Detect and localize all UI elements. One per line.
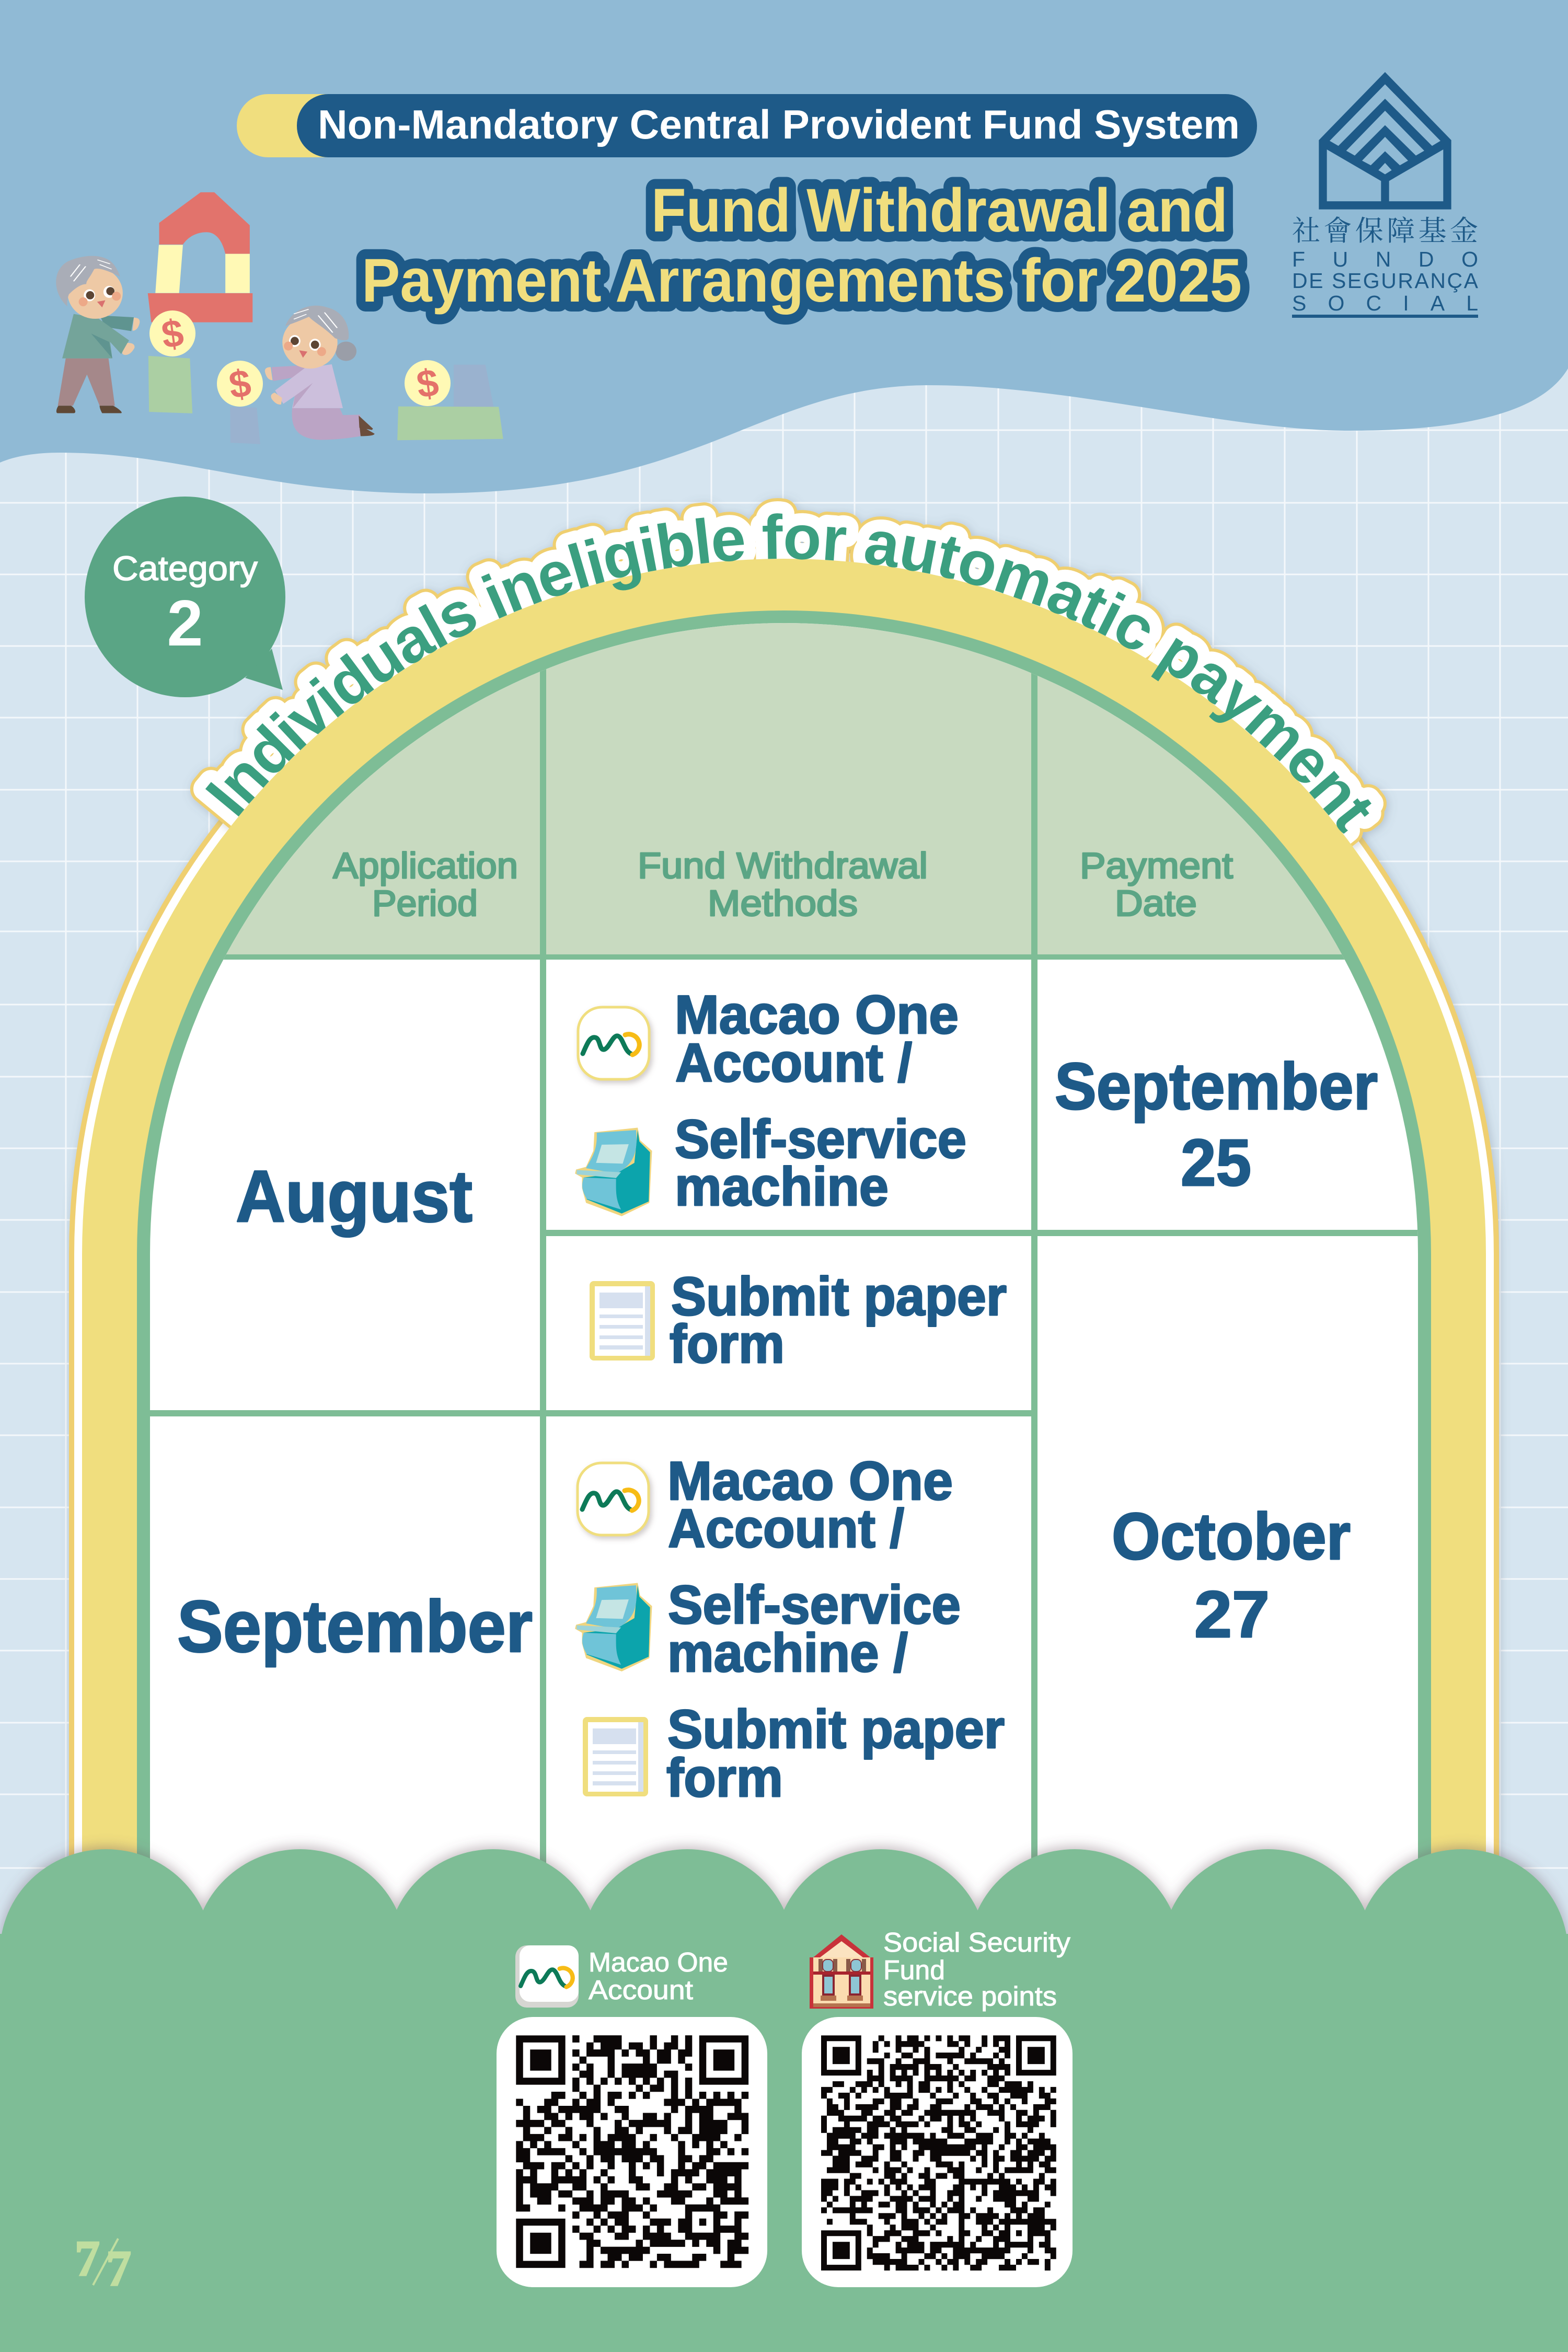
footer label: Social Security Fund service points: service points (883, 1981, 1057, 2012)
logo: Fundo de Segurança Social: FUNDO (1292, 247, 1478, 271)
method text: submit paper form (September): Submit paper (667, 1699, 1005, 1760)
method text: Macao One Account (September): Macao One (667, 1451, 953, 1512)
icon: Macao One Account (September) (578, 1463, 649, 1535)
footer icon: Macao One Account app (515, 1945, 579, 2008)
logo: Fundo de Segurança Social: SOCIAL (1292, 291, 1478, 315)
method text: Macao One Account (675, 985, 959, 1093)
column header: payment date: Date (1115, 883, 1197, 924)
curved heading outline: Individuals ineligible for automatic payment (189, 497, 1389, 850)
column header: application period: Application (333, 845, 518, 886)
curved heading outline: Individuals ineligible for automatic payment (193, 501, 1383, 844)
method text: Macao One Account (September): Account / (668, 1498, 904, 1559)
page number 7/7 (75, 2230, 131, 2296)
payment date: September 25: September (1055, 1050, 1378, 1123)
column header: payment date (1080, 845, 1233, 924)
payment date: September 25 (1055, 1050, 1378, 1200)
page number 7/7: 7 (106, 2240, 131, 2296)
column header: withdrawal methods: Methods (708, 883, 858, 924)
method text: submit paper form (670, 1266, 1007, 1375)
illustration: elderly couple with building blocks and coins: $ (414, 361, 441, 406)
method text: self-service machine: Self-service (675, 1109, 966, 1170)
QR card: Macao One Account (497, 2017, 767, 2287)
main title (362, 176, 1242, 315)
column header: withdrawal methods: Fund Withdrawal (638, 845, 928, 886)
method text: self-service machine (September) (667, 1575, 961, 1684)
arch frame outer rim (69, 545, 1499, 1960)
illustration: elderly couple with building blocks and coins: $ (226, 361, 253, 407)
footer label: Macao One Account: Account (589, 1975, 694, 2005)
footer scalloped panel (0, 1849, 1568, 2352)
logo: Fundo de Segurança Social: 社會保障基金 (1292, 209, 1478, 249)
icon: Macao One Account (578, 1007, 649, 1079)
table grid inside arch (150, 601, 1418, 1960)
footer label: Macao One Account (589, 1947, 728, 2005)
method text: submit paper form: Submit paper (671, 1266, 1007, 1327)
payment date: October 27: October (1112, 1500, 1351, 1573)
category speech bubble: 2 (167, 587, 203, 660)
arch bands (82, 559, 1486, 1960)
header wave band (0, 0, 1568, 493)
application period: September: September (177, 1585, 533, 1667)
method text: self-service machine (September): machine / (667, 1623, 908, 1684)
footer icon: Social Security Fund building (810, 1934, 873, 2009)
category speech bubble (85, 497, 285, 697)
payment date: September 25: 25 (1181, 1126, 1251, 1200)
footer label: Macao One Account: Macao One (589, 1947, 728, 1978)
category speech bubble: Category (112, 549, 258, 587)
logo: Fundo de Segurança Social: DE SEGURANÇA (1292, 269, 1479, 293)
column header: payment date: Payment (1080, 845, 1233, 886)
method text: Macao One Account (September) (667, 1451, 953, 1559)
subtitle pill (237, 94, 1257, 157)
application period: August: August (236, 1155, 472, 1237)
page number 7/7: 7 (75, 2230, 100, 2286)
column header: application period: Period (372, 883, 478, 924)
method text: self-service machine: machine (675, 1157, 889, 1217)
icon: paper form (September) (583, 1717, 648, 1796)
footer label: Social Security Fund service points: Fund (883, 1955, 945, 1986)
footer label: Social Security Fund service points (883, 1928, 1070, 2012)
illustration: elderly couple with building blocks and coins (56, 192, 503, 444)
method text: self-service machine (675, 1109, 966, 1217)
method text: submit paper form (September) (666, 1699, 1005, 1808)
illustration: elderly couple with building blocks and coins: $ (159, 311, 186, 356)
icon: self-service machine (575, 1128, 652, 1216)
method text: submit paper form (September): form (666, 1748, 783, 1808)
main title: Fund Withdrawal and (651, 176, 1228, 245)
payment date: October 27 (1112, 1500, 1351, 1651)
subtitle pill: Non-Mandatory Central Provident Fund System (318, 101, 1240, 147)
method text: Macao One Account: Macao One (675, 985, 959, 1045)
method text: Macao One Account: Account / (675, 1033, 912, 1093)
column header: application period (333, 845, 518, 924)
method text: self-service machine (September): Self-service (668, 1575, 961, 1635)
payment date: October 27: 27 (1194, 1577, 1270, 1651)
footer label: Social Security Fund service points: Social Security (883, 1928, 1070, 1958)
curved heading text: Individuals ineligible for automatic payment (205, 513, 1371, 834)
icon: self-service machine (September) (575, 1583, 652, 1671)
column header: withdrawal methods (638, 845, 928, 924)
method text: submit paper form: form (670, 1314, 785, 1375)
icon: paper form (590, 1281, 655, 1361)
QR card: Social Security Fund service points (802, 2017, 1073, 2287)
main title: Payment Arrangements for 2025 (362, 246, 1242, 315)
logo: Fundo de Segurança Social (1292, 72, 1479, 318)
